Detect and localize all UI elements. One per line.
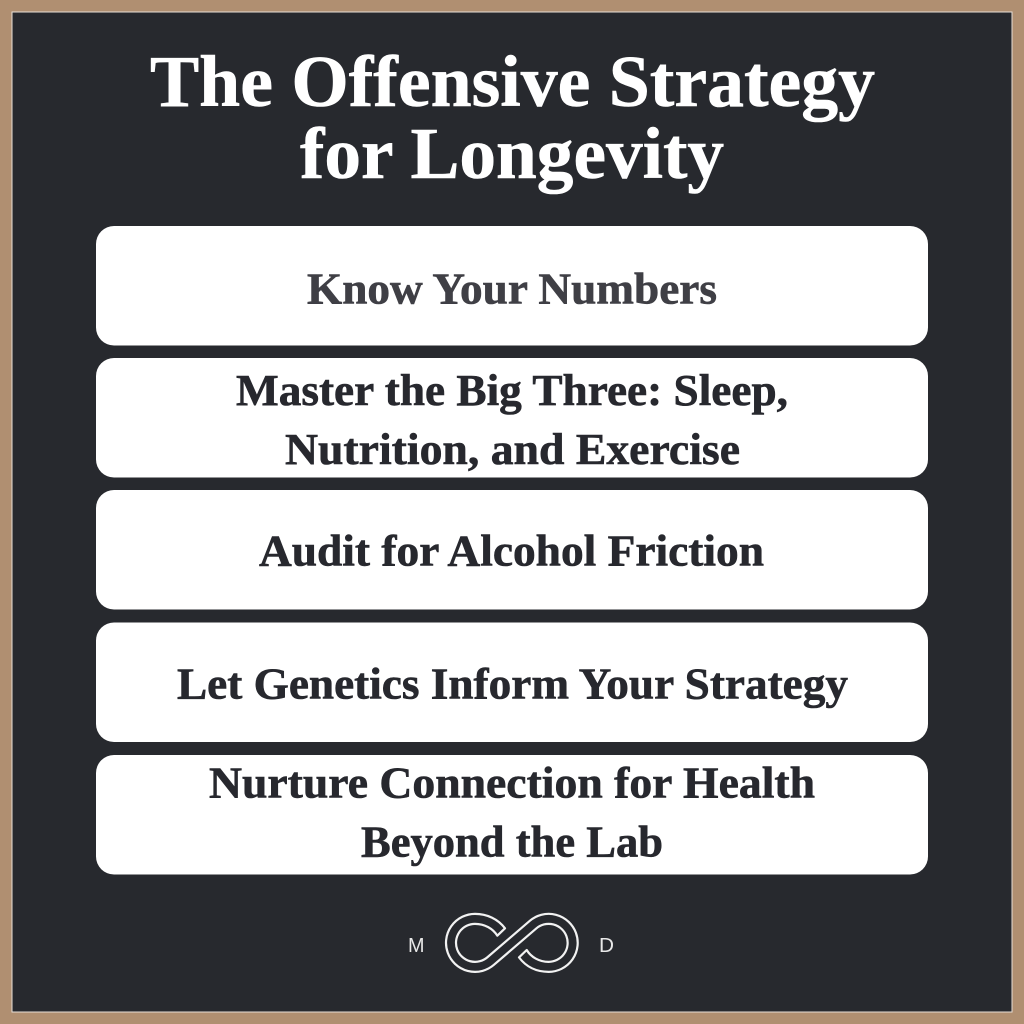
card: Master the Big Three bbox=[96, 358, 928, 478]
title: The Offensive Strategy bbox=[150, 41, 875, 122]
logo letter D: D bbox=[599, 935, 614, 957]
logo: MD infinity mark bbox=[408, 914, 614, 972]
logo letter M: M bbox=[408, 935, 424, 957]
card: Master the Big Three: Nutrition, and Exercise bbox=[285, 425, 740, 474]
card: Let Genetics Inform Your Strategy: Let Genetics Inform Your Strategy bbox=[177, 660, 848, 708]
card: Audit for Alcohol Friction: Audit for Alcohol Friction bbox=[259, 526, 764, 576]
icon: infinity symbol bbox=[446, 914, 578, 972]
card: Master the Big Three: Master the Big Three: Sleep, bbox=[236, 366, 788, 415]
card: Nurture Connection: Nurture Connection for Health bbox=[209, 758, 815, 808]
title bbox=[150, 41, 875, 194]
card: Nurture Connection: Beyond the Lab bbox=[361, 818, 663, 866]
title: for Longevity bbox=[300, 113, 724, 194]
card: Nurture Connection bbox=[96, 755, 928, 874]
card: Know Your Numbers: Know Your Numbers bbox=[307, 264, 717, 314]
card: Let Genetics Inform Your Strategy bbox=[96, 622, 928, 742]
card: Know Your Numbers bbox=[96, 226, 928, 346]
card: Audit for Alcohol Friction bbox=[96, 490, 928, 610]
